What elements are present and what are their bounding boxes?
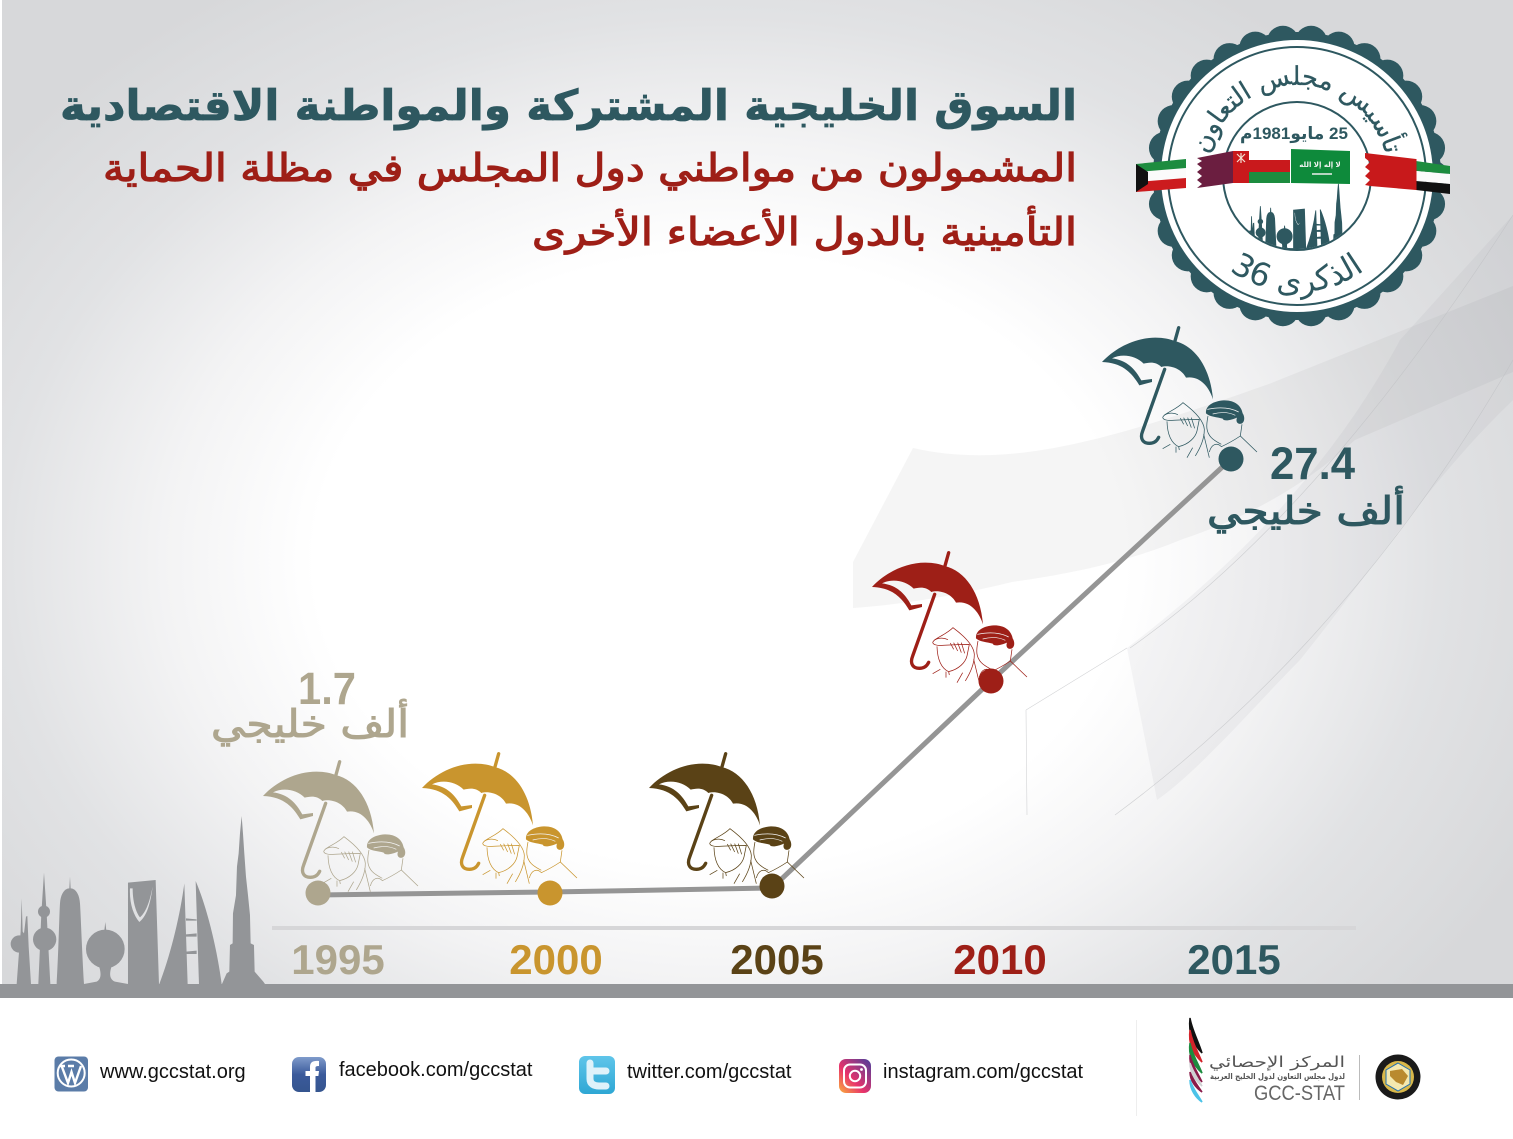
flag: Qatar (1197, 151, 1233, 188)
anniversary stamp badge (1136, 26, 1450, 326)
umbrella 2005 (649, 754, 804, 884)
year labels: 1995 (291, 936, 385, 983)
title (60, 81, 1077, 255)
subheading: line 2: المشمولون من مواطني دول المجلس في مظلة الحماية (103, 146, 1077, 191)
callout: 1.7 thousand: ألف خليجي (211, 699, 409, 746)
callout: 27.4 thousand: 27.4 (1270, 438, 1355, 489)
logo ribbons (1190, 1018, 1202, 1102)
umbrella 2000 (422, 754, 577, 884)
data point 2010 (978, 668, 1004, 694)
icon: twitter (579, 1056, 615, 1094)
icon: facebook (292, 1057, 326, 1092)
data point 1995 (306, 880, 330, 906)
subheading: line 3: التأمينية بالدول الأعضاء الأخرى (532, 206, 1077, 255)
flag: UAE (1416, 159, 1450, 194)
flag: Bahrain (1365, 153, 1416, 190)
data point 2015 (1218, 446, 1244, 472)
year labels: 2010 (953, 936, 1047, 983)
data point 2005 (760, 874, 784, 898)
stamp skyline (1249, 184, 1342, 249)
logo Arabic name: المركز الإحصائي (1209, 1053, 1345, 1072)
callout: 1.7 thousand: 1.7 (298, 663, 356, 714)
growth line (318, 459, 1231, 895)
umbrella 1995 (263, 762, 418, 892)
data point 2000 (538, 880, 562, 906)
stamp date: 25 مايو1981م (1240, 124, 1348, 144)
year labels: 2000 (509, 936, 603, 983)
logo Latin name: GCC-STAT (1254, 1082, 1345, 1105)
icon: instagram (839, 1059, 871, 1093)
year labels: 2015 (1187, 936, 1281, 983)
icon: wordpress (54, 1056, 88, 1092)
callout: 27.4 thousand (1207, 438, 1405, 533)
footer: instagram: instagram.com/gccstat (883, 1061, 1084, 1083)
footer: website (54, 1056, 246, 1092)
flag: Oman (1233, 151, 1290, 183)
footer: twitter: twitter.com/gccstat (627, 1061, 792, 1083)
umbrella 2010 (872, 553, 1027, 683)
footer: facebook (292, 1057, 533, 1092)
logo: GCC-STAT (1190, 1018, 1420, 1105)
axis divider (272, 926, 1356, 930)
stamp text: bottom arc: الذكرى 36 (1232, 252, 1362, 300)
footer divider (1136, 1020, 1137, 1116)
logo Arabic subtitle: لدول مجلس التعاون لدول الخليج العربية (1210, 1072, 1345, 1082)
footer: twitter (579, 1056, 792, 1094)
heading: line 1: السوق الخليجية المشتركة والمواطنة الاقتصادية (60, 81, 1077, 131)
year labels (291, 936, 1281, 983)
umbrella 2015 (1102, 328, 1257, 458)
footer: instagram (839, 1059, 1084, 1093)
flag: Saudi Arabia: لا إله إلا الله (1299, 161, 1341, 169)
footer: facebook: facebook.com/gccstat (339, 1059, 533, 1081)
flag: Saudi Arabia (1291, 149, 1350, 184)
GCC emblem (1376, 1054, 1420, 1100)
flag: Kuwait (1136, 159, 1186, 192)
callout: 1.7 thousand (211, 663, 409, 746)
ground band (0, 984, 1513, 998)
footer: website: www.gccstat.org (99, 1061, 246, 1083)
stamp text: top arc: تأسيس مجلس التعاون (1199, 65, 1408, 152)
callout: 27.4 thousand: ألف خليجي (1207, 486, 1405, 533)
skyline silhouette (11, 816, 265, 984)
year labels: 2005 (730, 936, 824, 983)
